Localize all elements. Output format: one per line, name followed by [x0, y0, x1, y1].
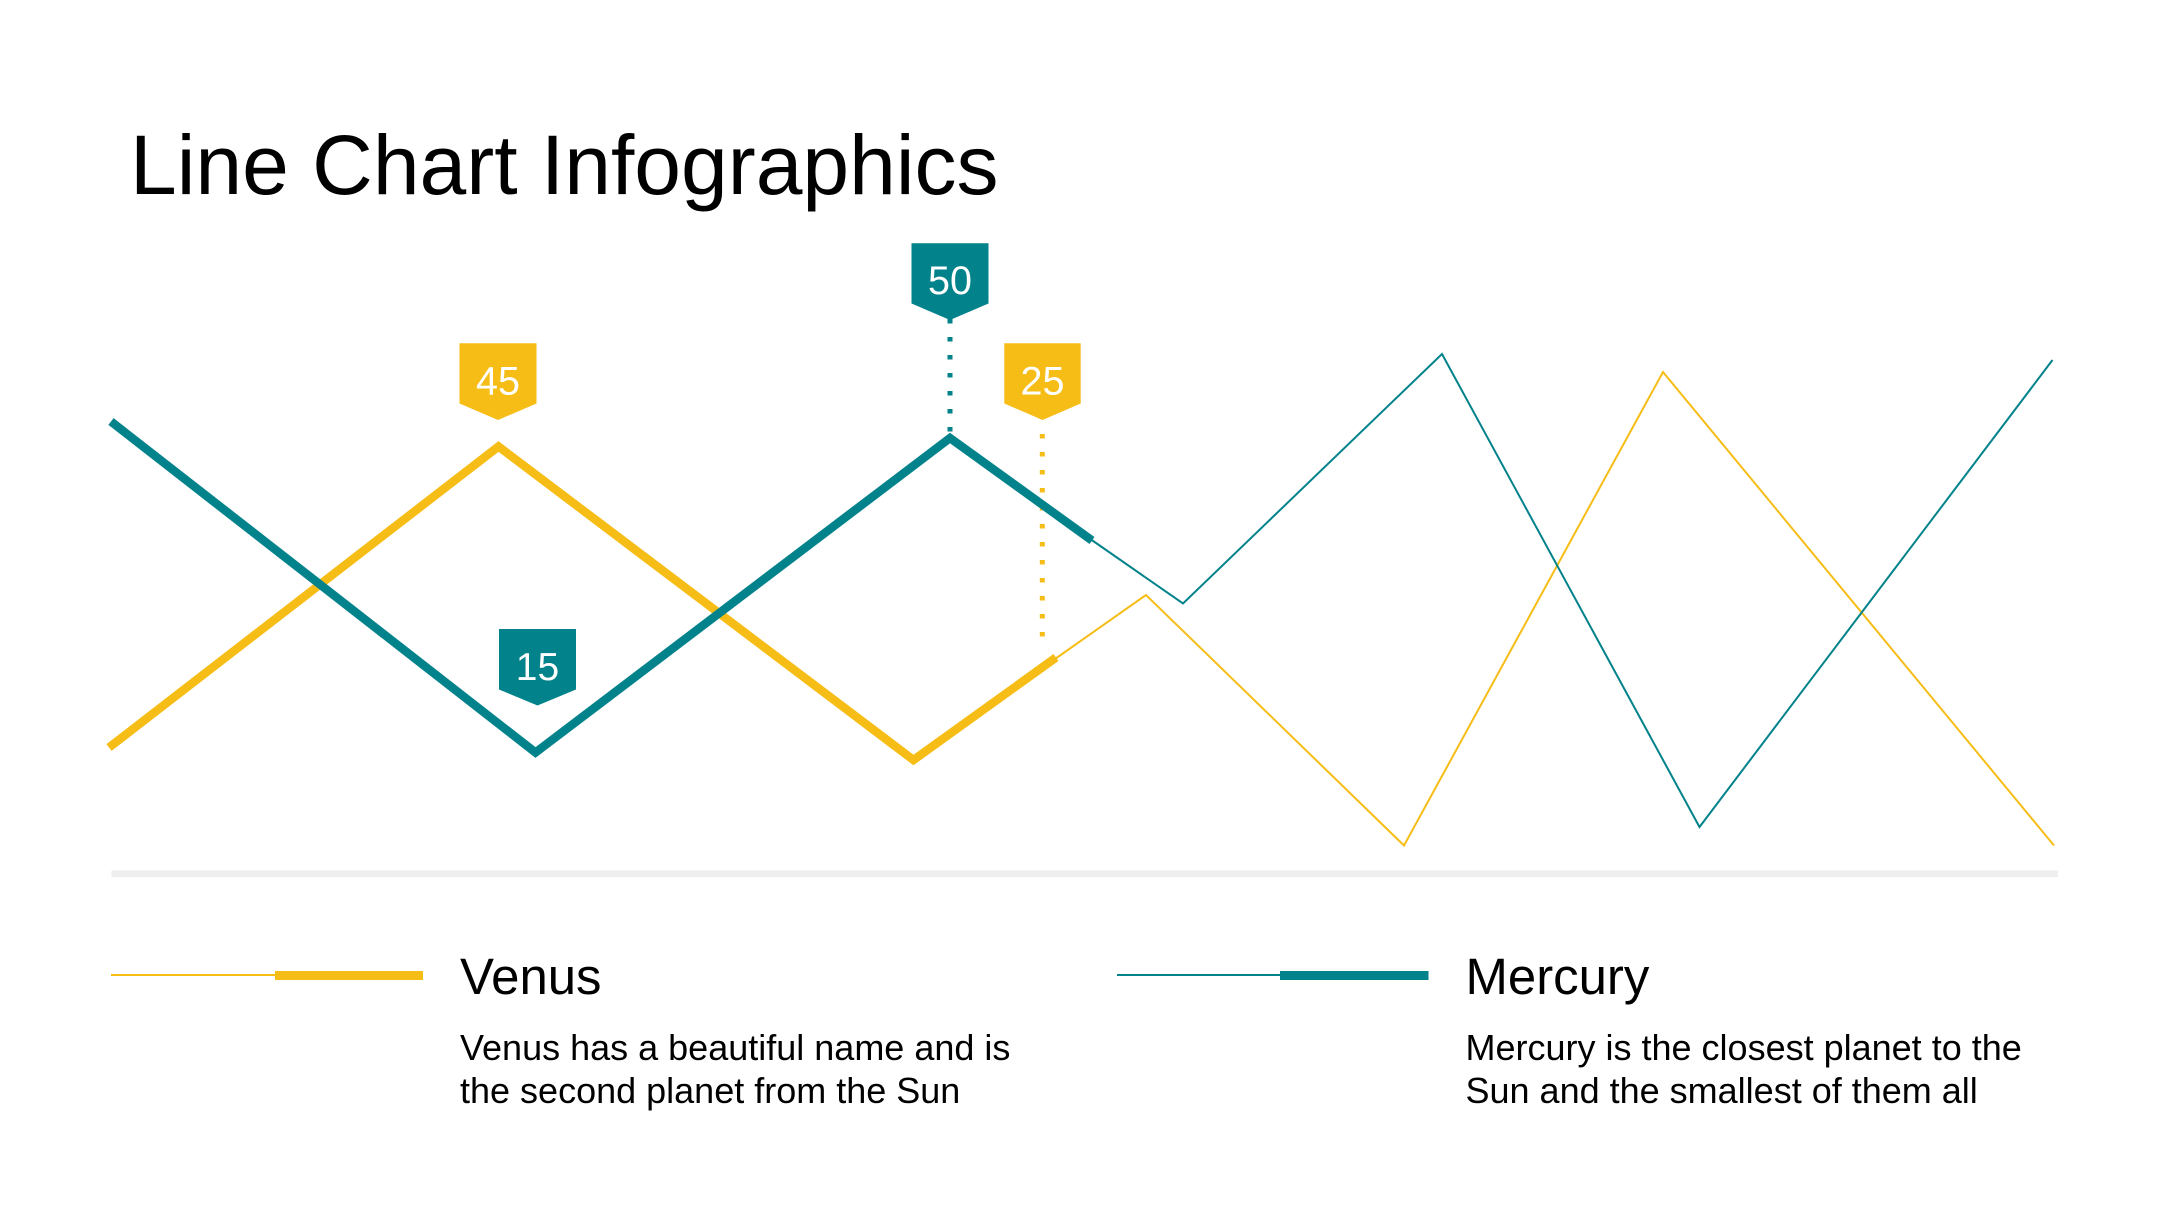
legend: Venus	[111, 948, 1020, 1111]
Venus series: thick line	[109, 446, 1056, 760]
legend heading: Mercury: Mercury	[1466, 948, 1650, 1005]
badge: 25	[1004, 343, 1081, 420]
dotted connector: 25	[1040, 434, 1045, 637]
badge: 15	[499, 629, 576, 706]
axis baseline	[112, 870, 2058, 877]
legend heading: Venus: Venus	[460, 948, 602, 1005]
legend description: Mercury: Sun and the smallest of them all	[1466, 1070, 1978, 1111]
badge: 15: 15	[516, 646, 559, 689]
legend key: Mercury	[1117, 971, 1428, 980]
line chart	[109, 243, 2058, 877]
title: Line Chart Infographics	[130, 118, 999, 212]
badge: 45: 45	[476, 360, 520, 404]
Mercury series: thin line	[1091, 354, 2052, 827]
legend description: Venus: Venus has a beautiful name and is	[460, 1027, 1010, 1068]
badge: 45	[460, 343, 536, 420]
Venus series: thin line	[1055, 372, 2054, 846]
dotted connector: 50	[948, 319, 952, 432]
legend description: Venus: the second planet from the Sun	[460, 1070, 960, 1111]
badge: 50: 50	[928, 259, 972, 303]
legend key: Venus	[111, 971, 423, 980]
badge: 50	[912, 243, 988, 320]
legend description: Mercury: Mercury is the closest planet to the	[1466, 1027, 2022, 1068]
badge: 25: 25	[1021, 360, 1064, 404]
Mercury series: thick line	[111, 422, 1092, 752]
legend: Mercury	[1117, 948, 2032, 1111]
